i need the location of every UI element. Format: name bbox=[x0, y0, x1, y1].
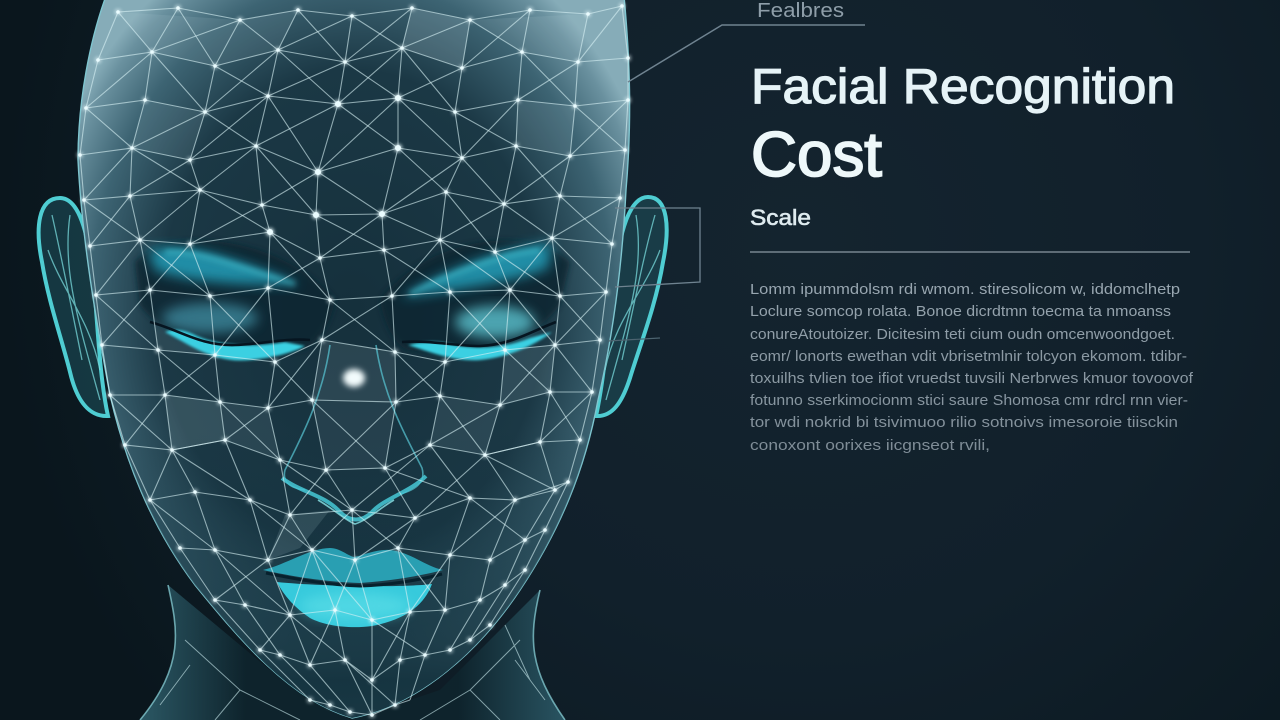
mesh: glowing nodes bbox=[80, 6, 628, 715]
subheading: Scale: Scale bbox=[750, 205, 811, 230]
face silhouette bbox=[78, 0, 630, 718]
facet shading bbox=[118, 8, 588, 560]
callout: ear bracket bbox=[615, 208, 700, 287]
eye: left bbox=[150, 303, 310, 361]
divider line bbox=[750, 251, 1190, 253]
lips bbox=[263, 548, 443, 627]
title bbox=[751, 60, 1175, 190]
callout: features label: Fealbres bbox=[757, 0, 844, 22]
title line: Cost: Cost bbox=[751, 120, 882, 190]
eye: right bbox=[402, 306, 556, 360]
mesh: wireframe lines bbox=[80, 6, 628, 715]
eyebrow: left bbox=[148, 248, 300, 284]
neck bbox=[140, 585, 565, 720]
chin shading bbox=[110, 395, 598, 718]
body text block: fotunno sserkimocionm stici saure Shomosa cmr rdrcl rnn vier- bbox=[750, 392, 1188, 409]
body text block: toxuilhs tvlien toe ifiot vruedst tuvsili Nerbrwes kmuor tovoovof bbox=[750, 370, 1194, 387]
callout: features leader line bbox=[628, 25, 865, 82]
nose bbox=[282, 345, 426, 524]
body text block: Lomm ipummdolsm rdi wmom. stiresolicom w, iddomclhetp bbox=[750, 281, 1180, 298]
body text block: tor wdi nokrid bi tsivimuoo rilio sotnoivs imesoroie tiisckin bbox=[750, 414, 1178, 431]
title line: Facial Recognition: Facial Recognition bbox=[751, 60, 1175, 114]
body text block: Loclure somcop rolata. Bonoe dicrdtmn toecma ta nmoanss bbox=[750, 303, 1171, 320]
illustration: wireframe head bbox=[39, 0, 667, 720]
ear: left bbox=[39, 198, 108, 416]
body text block: conoxont oorixes iicgnseot rvili, bbox=[750, 437, 990, 454]
eye region: dark sockets bbox=[135, 241, 570, 353]
ear: right bbox=[596, 197, 667, 416]
eyebrow: right bbox=[400, 244, 552, 298]
body text block bbox=[750, 281, 1194, 454]
body text block: conureAtoutoizer. Dicitesim teti cium oudn omcenwoondgoet. bbox=[750, 326, 1175, 343]
callout: cheek tick line bbox=[608, 338, 660, 341]
body text block: eomr/ lonorts ewethan vdit vbrisetmlnir tolcyon ekomom. tdibr- bbox=[750, 348, 1187, 365]
